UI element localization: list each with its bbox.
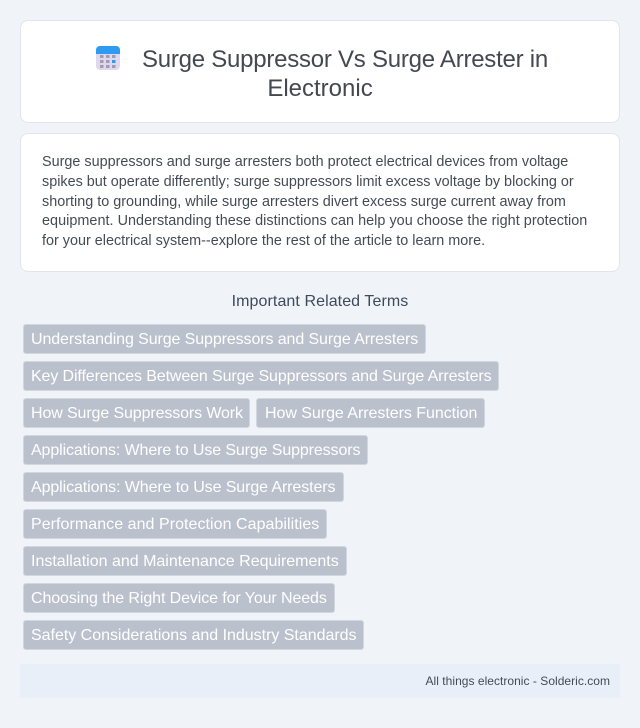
- tag: understanding: [23, 324, 426, 354]
- tag: safety: [23, 620, 364, 650]
- text block: description: for your electrical system--explore the rest of the article to learn more.: [42, 233, 485, 249]
- heading: important related terms: Important Related Terms: [232, 293, 408, 310]
- tag: applications arresters: Applications: Where to Use Surge Arresters: [31, 479, 335, 496]
- tag: performance: Performance and Protection Capabilities: [31, 516, 319, 533]
- icon: calendar grid: [96, 46, 120, 70]
- tag: applications suppressors: Applications: Where to Use Surge Suppressors: [31, 442, 360, 459]
- tag: understanding: Understanding Surge Suppressors and Surge Arresters: [31, 331, 418, 348]
- tag: key differences: [23, 361, 499, 391]
- panel: related terms tags: [23, 324, 499, 650]
- panel: title card: [20, 20, 620, 123]
- tag: how arresters function: [256, 398, 485, 428]
- text block: description: [42, 154, 587, 249]
- text block: description: spikes but operate differently; surge suppressors limit excess voltage by blocking or: [42, 174, 574, 190]
- panel: description: [20, 133, 620, 272]
- tag: installation: [23, 546, 347, 576]
- tag: how suppressors work: How Surge Suppressors Work: [31, 405, 243, 422]
- tag: choosing: [23, 583, 335, 613]
- tag: key differences: Key Differences Between Surge Suppressors and Surge Arresters: [31, 368, 492, 385]
- title: Electronic: [267, 75, 373, 102]
- tag: applications suppressors: [23, 435, 368, 465]
- title: [142, 46, 548, 102]
- footer: [20, 664, 620, 698]
- tag: applications arresters: [23, 472, 344, 502]
- tag: how arresters function: How Surge Arresters Function: [265, 405, 477, 422]
- tag: performance: [23, 509, 327, 539]
- text block: description: shorting to grounding, while surge arresters divert excess surge current away from: [42, 194, 566, 210]
- text block: description: Surge suppressors and surge arresters both protect electrical devices from voltage: [42, 154, 568, 170]
- tag: choosing: Choosing the Right Device for Your Needs: [31, 590, 327, 607]
- tag: how suppressors work: [23, 398, 250, 428]
- title: Surge Suppressor Vs Surge Arrester in: [142, 46, 548, 73]
- tag: installation: Installation and Maintenance Requirements: [31, 553, 339, 570]
- text block: description: equipment. Understanding these distinctions can help you choose the right protection: [42, 213, 587, 229]
- footer text: All things electronic - Solderic.com: [426, 674, 610, 688]
- tag: safety: Safety Considerations and Industry Standards: [31, 627, 357, 644]
